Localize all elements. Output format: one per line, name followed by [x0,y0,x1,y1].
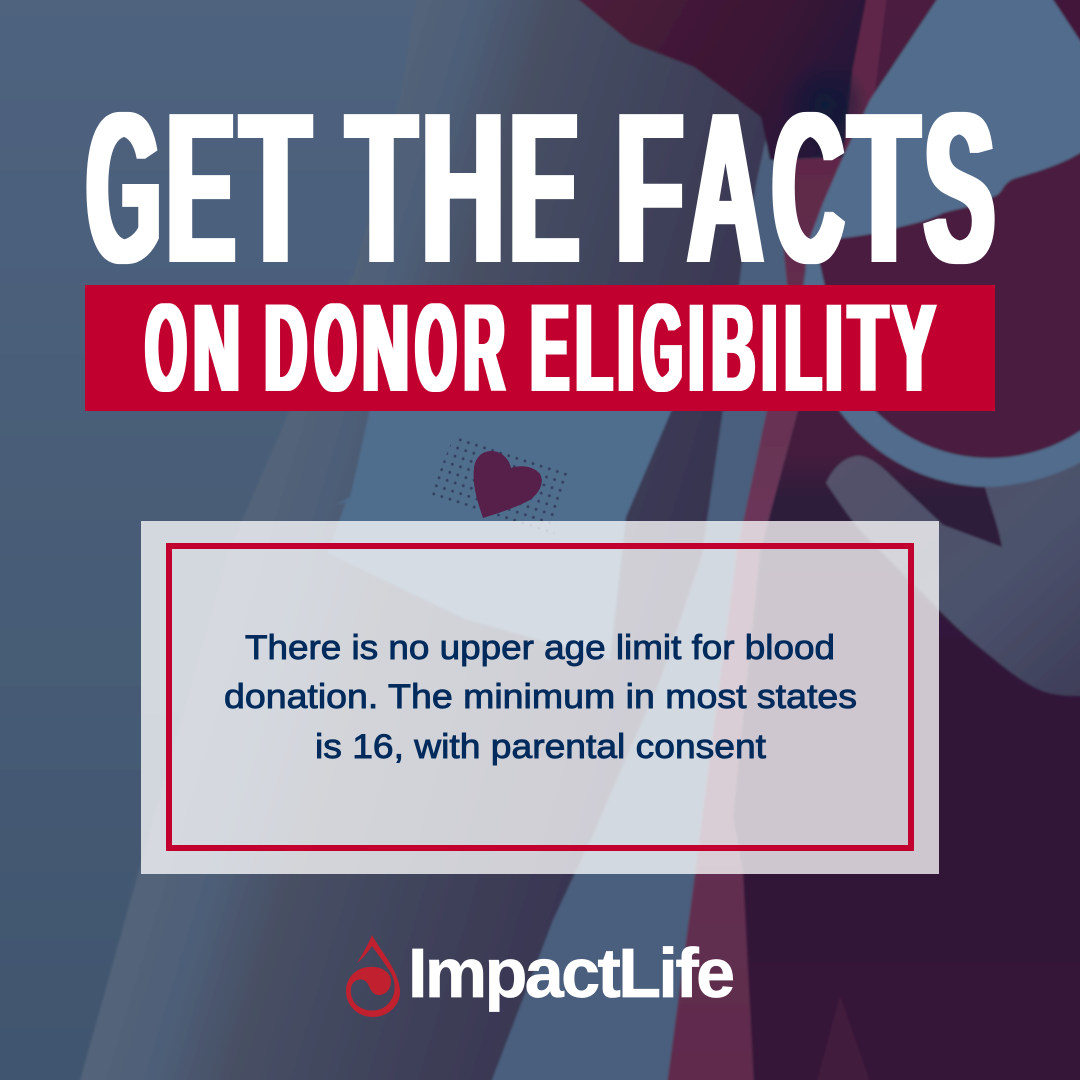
title: GET THE FACTS: T [240,67,310,308]
title: GET THE FACTS: G [86,67,161,308]
subtitle: ON DONOR ELIGIBILITY: N [193,279,240,418]
title: GET THE FACTS: A [688,67,763,308]
subtitle: ON DONOR ELIGIBILITY: B [712,279,755,418]
subtitle banner [85,279,995,418]
panel red border [169,546,911,848]
icon: heart on bandage [474,451,542,518]
fact text [224,629,857,766]
subtitle: ON DONOR ELIGIBILITY: D [265,279,307,418]
subtitle: ON DONOR ELIGIBILITY: E [531,279,569,418]
subtitle: ON DONOR ELIGIBILITY: O [315,279,356,418]
subtitle: ON DONOR ELIGIBILITY: Y [893,279,935,418]
subtitle: ON DONOR ELIGIBILITY: L [785,279,821,418]
subtitle: ON DONOR ELIGIBILITY: L [576,279,612,418]
subtitle: ON DONOR ELIGIBILITY: G [642,279,682,418]
fact text: There is no upper age limit for blood [245,629,835,667]
title: GET THE FACTS: F [616,67,683,308]
title: GET THE FACTS: C [772,67,844,308]
icon: blood drop swirl [346,935,400,1017]
subtitle: ON DONOR ELIGIBILITY: I [689,279,704,418]
bandage dotted pad [428,434,570,540]
wordmark: ImpactLife [408,934,735,1012]
subtitle: ON DONOR ELIGIBILITY: R [464,279,504,418]
title: GET THE FACTS: E [509,67,579,308]
fact text: is 16, with parental consent [315,728,767,766]
subtitle: ON DONOR ELIGIBILITY: N [362,279,409,418]
title: GET THE FACTS: H [422,67,504,308]
subtitle: ON DONOR ELIGIBILITY: I [826,279,842,418]
subtitle: ON DONOR ELIGIBILITY: I [762,279,776,418]
panel: age limit fact [141,521,939,874]
title: GET THE FACTS: T [346,67,416,308]
subtitle: ON DONOR ELIGIBILITY: I [618,279,634,418]
subtitle: ON DONOR ELIGIBILITY: O [146,279,186,418]
subtitle: ON DONOR ELIGIBILITY: T [849,279,887,418]
subtitle: ON DONOR ELIGIBILITY: O [416,279,456,418]
title: GET THE FACTS: E [166,67,235,308]
infographic canvas: S [924,67,995,308]
logo: ImpactLife [346,934,735,1017]
fact text: donation. The minimum in most states [224,678,857,716]
title: GET THE FACTS: T [848,67,919,308]
